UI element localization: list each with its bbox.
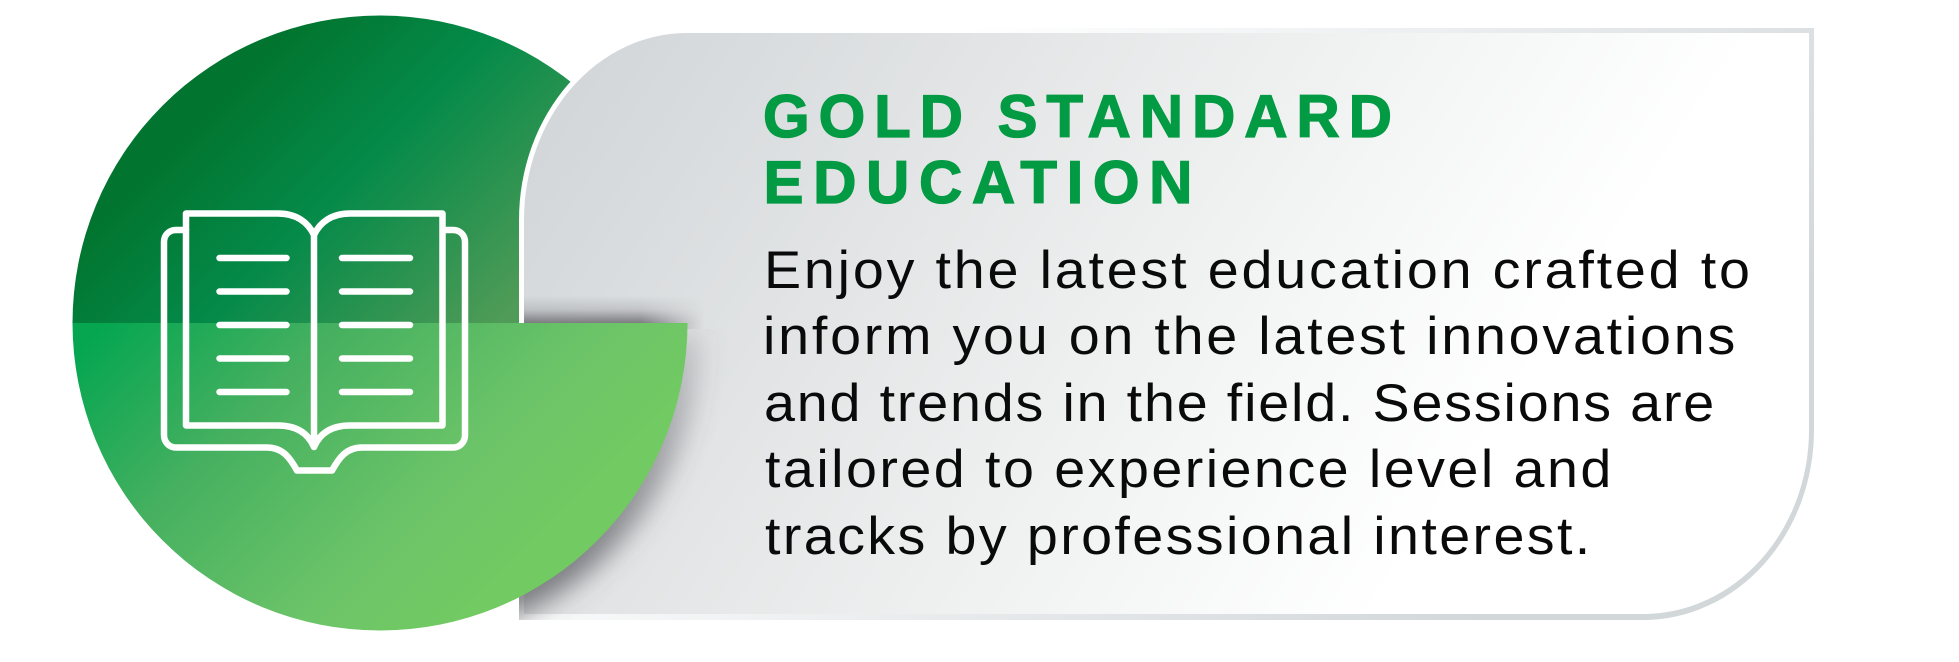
card outer border — [519, 28, 1814, 620]
panel: description card — [519, 28, 1814, 620]
icon: open book — [164, 214, 465, 470]
heading: EDUCATION — [764, 149, 1192, 216]
body text: and trends in the field. Sessions are — [764, 373, 1714, 433]
text lines on pages — [220, 258, 410, 392]
light green bottom semicircle — [72, 323, 688, 630]
book cover — [164, 230, 465, 470]
body text: tailored to experience level and — [765, 439, 1611, 499]
card gradient fill — [524, 33, 1809, 614]
body text — [763, 240, 1750, 566]
body text: inform you on the latest innovations — [763, 306, 1735, 366]
shadow: strip under the green half — [524, 300, 699, 329]
dark green top semicircle — [72, 15, 688, 323]
heading — [763, 83, 1392, 216]
body text: tracks by professional interest. — [765, 506, 1590, 566]
book pages — [186, 214, 442, 447]
shadow: along the green half's curve — [519, 329, 708, 620]
heading: GOLD STANDARD — [763, 83, 1392, 150]
body text: Enjoy the latest education crafted to — [764, 240, 1750, 300]
